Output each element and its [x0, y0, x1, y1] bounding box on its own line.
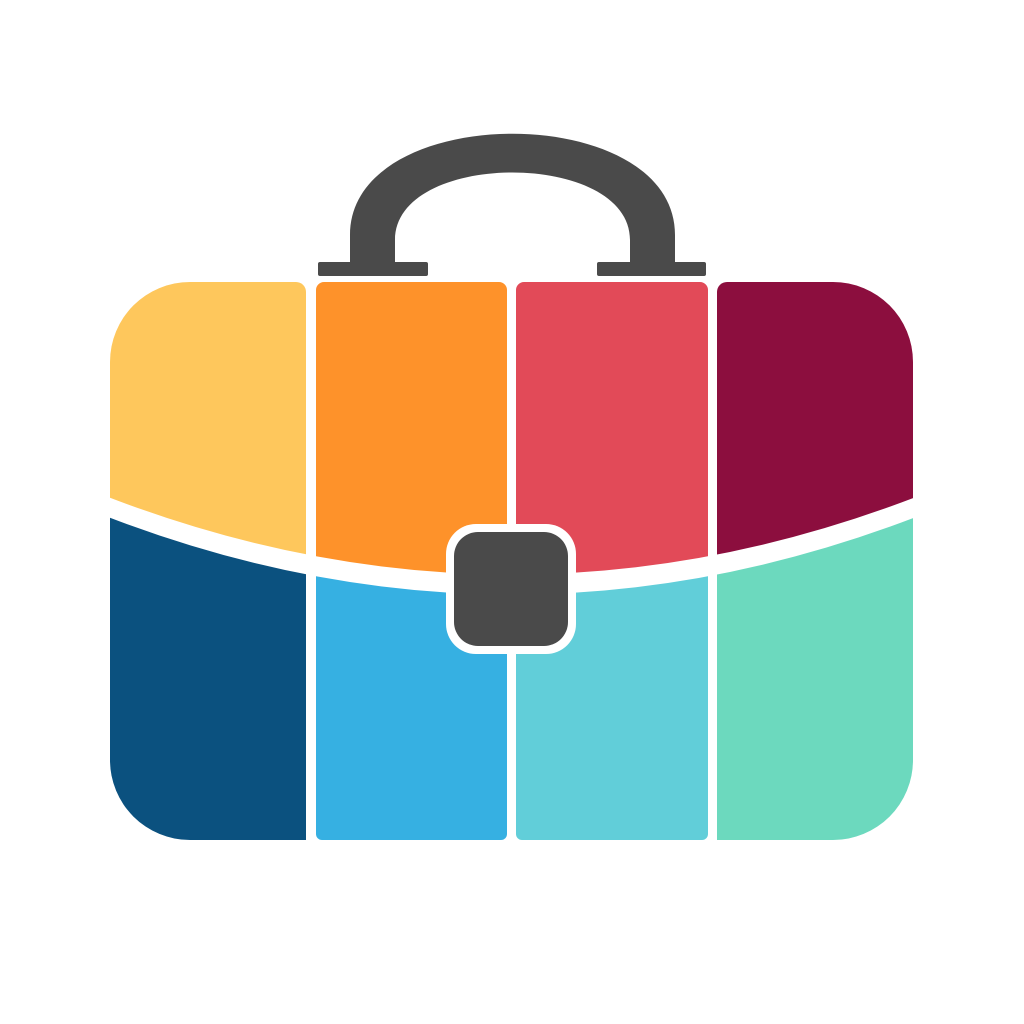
segment: top 4 maroon	[717, 282, 913, 554]
segment: bottom 4 mint	[717, 518, 913, 840]
segment: top 2 orange	[316, 282, 507, 572]
briefcase body segments	[110, 282, 913, 850]
handle	[318, 134, 706, 276]
segment: bottom 1 navy	[110, 518, 306, 840]
segment: bottom 3 light blue	[516, 576, 708, 840]
upper segments	[110, 282, 913, 573]
lock	[446, 524, 576, 654]
segment: bottom 2 blue	[316, 576, 507, 840]
segment: top 1 yellow	[110, 282, 306, 554]
lower segments	[110, 518, 913, 840]
segment: top 3 red	[516, 282, 708, 573]
infographic: briefcase	[110, 134, 913, 840]
